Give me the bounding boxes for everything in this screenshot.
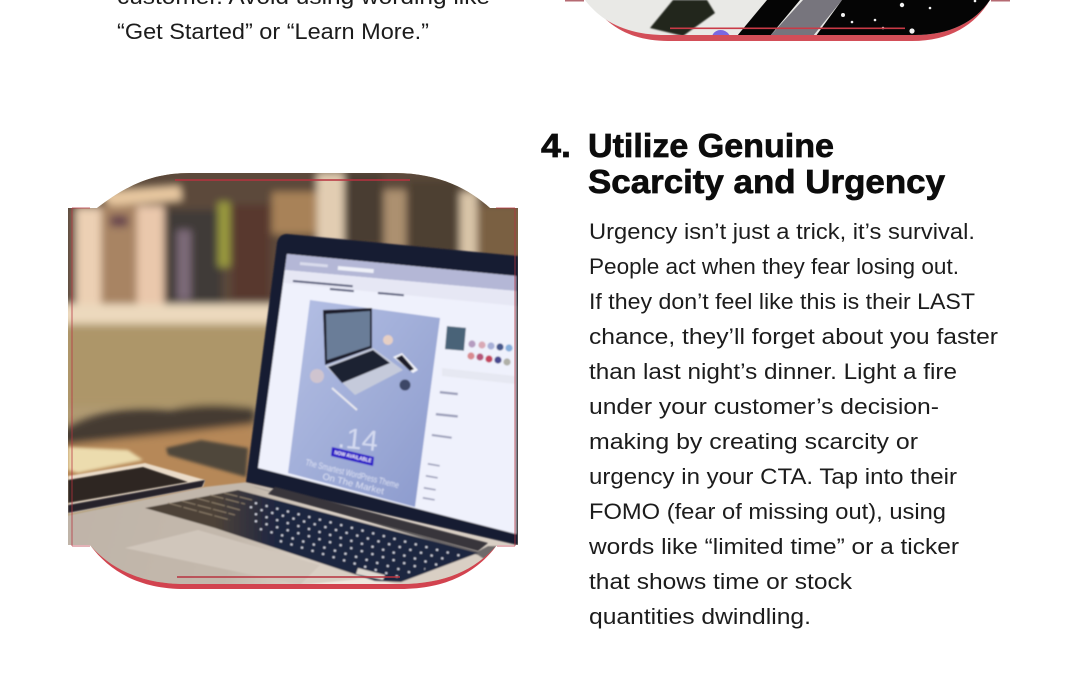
heading: step 4 (541, 127, 946, 200)
body text block: under your customer’s decision- (589, 394, 939, 419)
thin red frame lines (72, 180, 515, 577)
body text block: that shows time or stock (589, 569, 853, 594)
heading: step 4: 4. (541, 127, 571, 164)
laptop lid and screen (246, 234, 518, 551)
laptop deck and keyboard (68, 482, 518, 584)
body text block: words like “limited time” or a ticker (588, 534, 959, 559)
photo: laptop on desk (60, 165, 525, 595)
body text block: Urgency isn’t just a trick, it’s survival. (589, 219, 975, 244)
body text block: FOMO (fear of missing out), using (589, 499, 946, 524)
photo scene (60, 165, 525, 595)
laptop lid and screen: NOW AVAILABLE (334, 450, 372, 465)
body text block (588, 219, 998, 629)
laptop lid and screen: On The Market (322, 471, 386, 496)
body text block: chance, they’ll forget about you faster (589, 324, 998, 349)
top text block: “Get Started” or “Learn More.” (117, 19, 429, 44)
body text block: If they don’t feel like this is their LAST (589, 289, 975, 314)
body text block: making by creating scarcity or (589, 429, 918, 454)
body text block: People act when they fear losing out. (589, 254, 959, 279)
heading: step 4: Utilize Genuine (588, 127, 834, 164)
body text block: quantities dwindling. (589, 604, 811, 629)
body text block: than last night’s dinner. Light a fire (589, 359, 957, 384)
laptop lid and screen: .14 (336, 422, 380, 458)
small desk items (68, 440, 248, 514)
body text block: urgency in your CTA. Tap into their (589, 464, 957, 489)
heading: step 4: Scarcity and Urgency (588, 163, 946, 200)
top image fragment (565, 0, 1010, 45)
top text block (117, 0, 490, 44)
laptop lid and screen: The Smartest WordPress Theme (305, 457, 400, 490)
red rim under photo (90, 545, 497, 589)
